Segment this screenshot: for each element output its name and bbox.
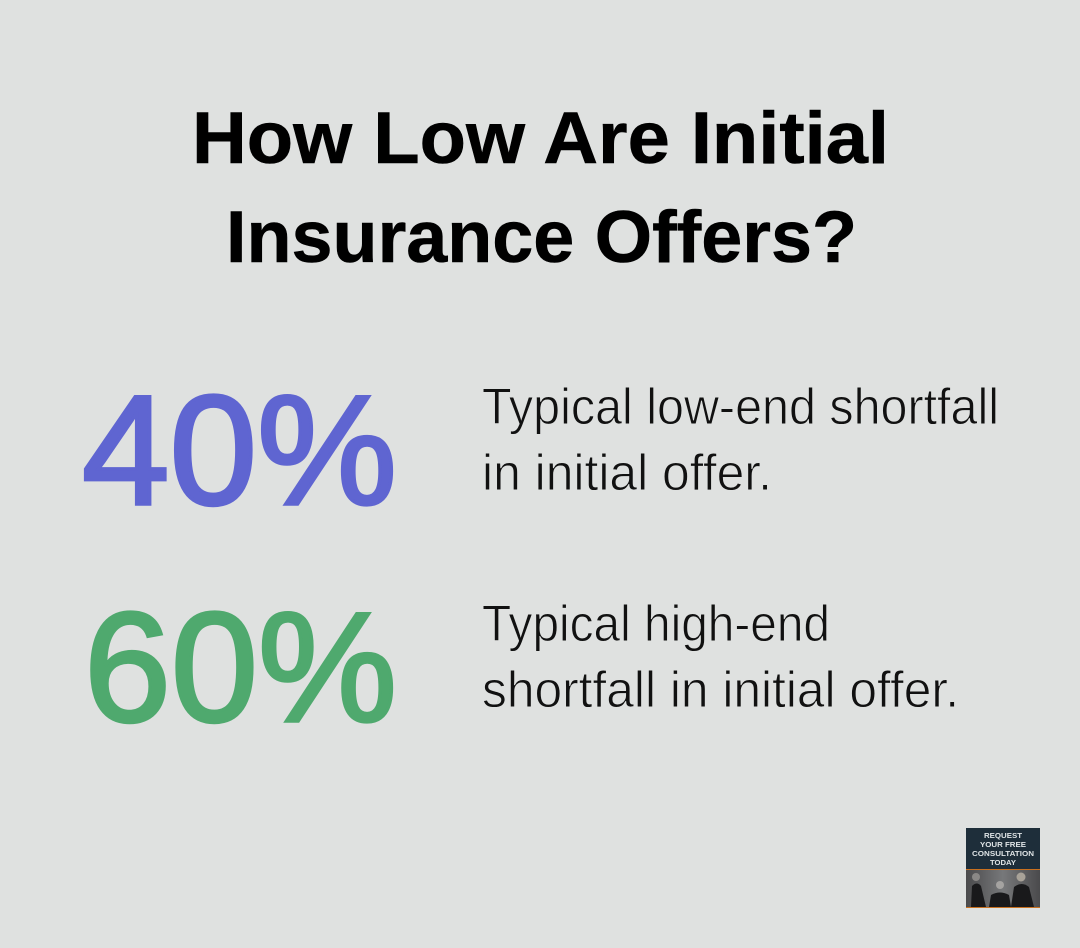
text: 60% description xyxy=(482,595,959,718)
badge: request consultation: CONSULTATION xyxy=(972,849,1034,858)
text: 60% description: Typical high-end xyxy=(482,595,830,652)
title: How Low Are Initial xyxy=(192,98,889,179)
title: Insurance Offers? xyxy=(226,197,857,278)
badge: request consultation: YOUR FREE xyxy=(980,840,1026,849)
text: 40% description: in initial offer. xyxy=(482,444,772,501)
badge: request consultation: REQUEST xyxy=(984,831,1022,840)
badge: request consultation xyxy=(966,828,1040,908)
text: 40% description: Typical low-end shortfall xyxy=(482,378,999,435)
badge: request consultation: TODAY xyxy=(990,858,1016,867)
photo: three people xyxy=(971,872,1034,907)
stat: 60%: 60% xyxy=(84,581,397,755)
stat: 40%: 40% xyxy=(82,364,397,538)
text: 40% description xyxy=(482,378,999,501)
title xyxy=(192,98,889,278)
text: 60% description: shortfall in initial offer. xyxy=(482,661,959,718)
